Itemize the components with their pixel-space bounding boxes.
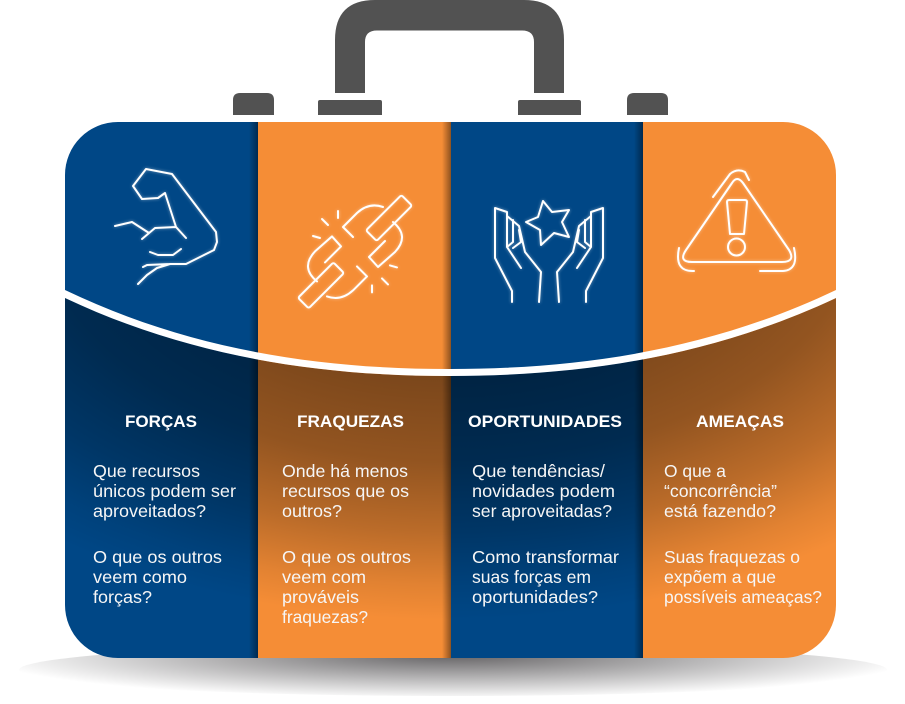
icon: hands holding star [495, 201, 603, 302]
questions: oportunidades: Que tendências/ [472, 461, 605, 481]
column: fraquezas [258, 122, 451, 658]
questions: forças: O que os outros [93, 547, 222, 567]
panel text: forças [93, 413, 236, 607]
ground shadow [19, 644, 887, 696]
questions: fraquezas: outros? [282, 501, 342, 521]
heading: forças: FORÇAS [125, 413, 197, 431]
questions: oportunidades: novidades podem [472, 481, 615, 501]
questions: oportunidades: oportunidades? [472, 587, 598, 607]
questions: ameaças: possíveis ameaças? [664, 587, 822, 607]
questions: forças [93, 461, 236, 607]
questions: fraquezas [282, 461, 411, 627]
panel text: ameaças [664, 413, 822, 607]
questions: ameaças: expõem a que [664, 567, 776, 587]
questions: oportunidades: Como transformar [472, 547, 619, 567]
questions: oportunidades [472, 461, 619, 607]
questions: ameaças: “concorrência” [664, 481, 777, 501]
questions: forças: forças? [93, 587, 152, 607]
questions: forças: veem como [93, 567, 187, 587]
questions: fraquezas: prováveis [282, 587, 359, 607]
heading: fraquezas: FRAQUEZAS [297, 413, 404, 431]
questions: forças: Que recursos [93, 461, 200, 481]
lower pocket shading [65, 298, 836, 605]
icon: flexed arm [115, 169, 217, 284]
questions: fraquezas: veem com [282, 567, 366, 587]
questions: fraquezas: fraquezas? [282, 607, 368, 627]
briefcase hardware: latches and handle mounts [233, 93, 668, 115]
questions: forças: únicos podem ser [93, 481, 236, 501]
star [526, 201, 569, 245]
column: oportunidades [451, 122, 643, 658]
questions: ameaças [664, 461, 822, 607]
questions: fraquezas: recursos que os [282, 481, 409, 501]
heading: oportunidades: OPORTUNIDADES [468, 413, 622, 431]
column: ameaças [643, 122, 836, 658]
column edge shadows [249, 122, 643, 658]
questions: oportunidades: ser aproveitadas? [472, 501, 612, 521]
questions: fraquezas: O que os outros [282, 547, 411, 567]
questions: ameaças: O que a [664, 461, 726, 481]
questions: forças: aproveitados? [93, 501, 206, 521]
exclamation mark [727, 200, 747, 234]
panel text: fraquezas [282, 413, 411, 627]
column: forças [65, 122, 258, 658]
questions: oportunidades: suas forças em [472, 567, 591, 587]
heading: ameaças: AMEAÇAS [696, 413, 784, 431]
briefcase handle [335, 0, 564, 93]
lower chain half [298, 236, 397, 308]
right hand [557, 208, 603, 302]
icon: warning triangle [678, 170, 795, 271]
panel text: oportunidades [468, 413, 622, 607]
briefcase body with four columns [65, 122, 836, 658]
questions: ameaças: Suas fraquezas o [664, 547, 800, 567]
white curved pocket line [65, 290, 836, 376]
upper chain half [313, 195, 412, 267]
left hand [495, 208, 541, 302]
questions: ameaças: está fazendo? [664, 501, 776, 521]
questions: fraquezas: Onde há menos [282, 461, 408, 481]
icon: broken chain [298, 195, 412, 308]
